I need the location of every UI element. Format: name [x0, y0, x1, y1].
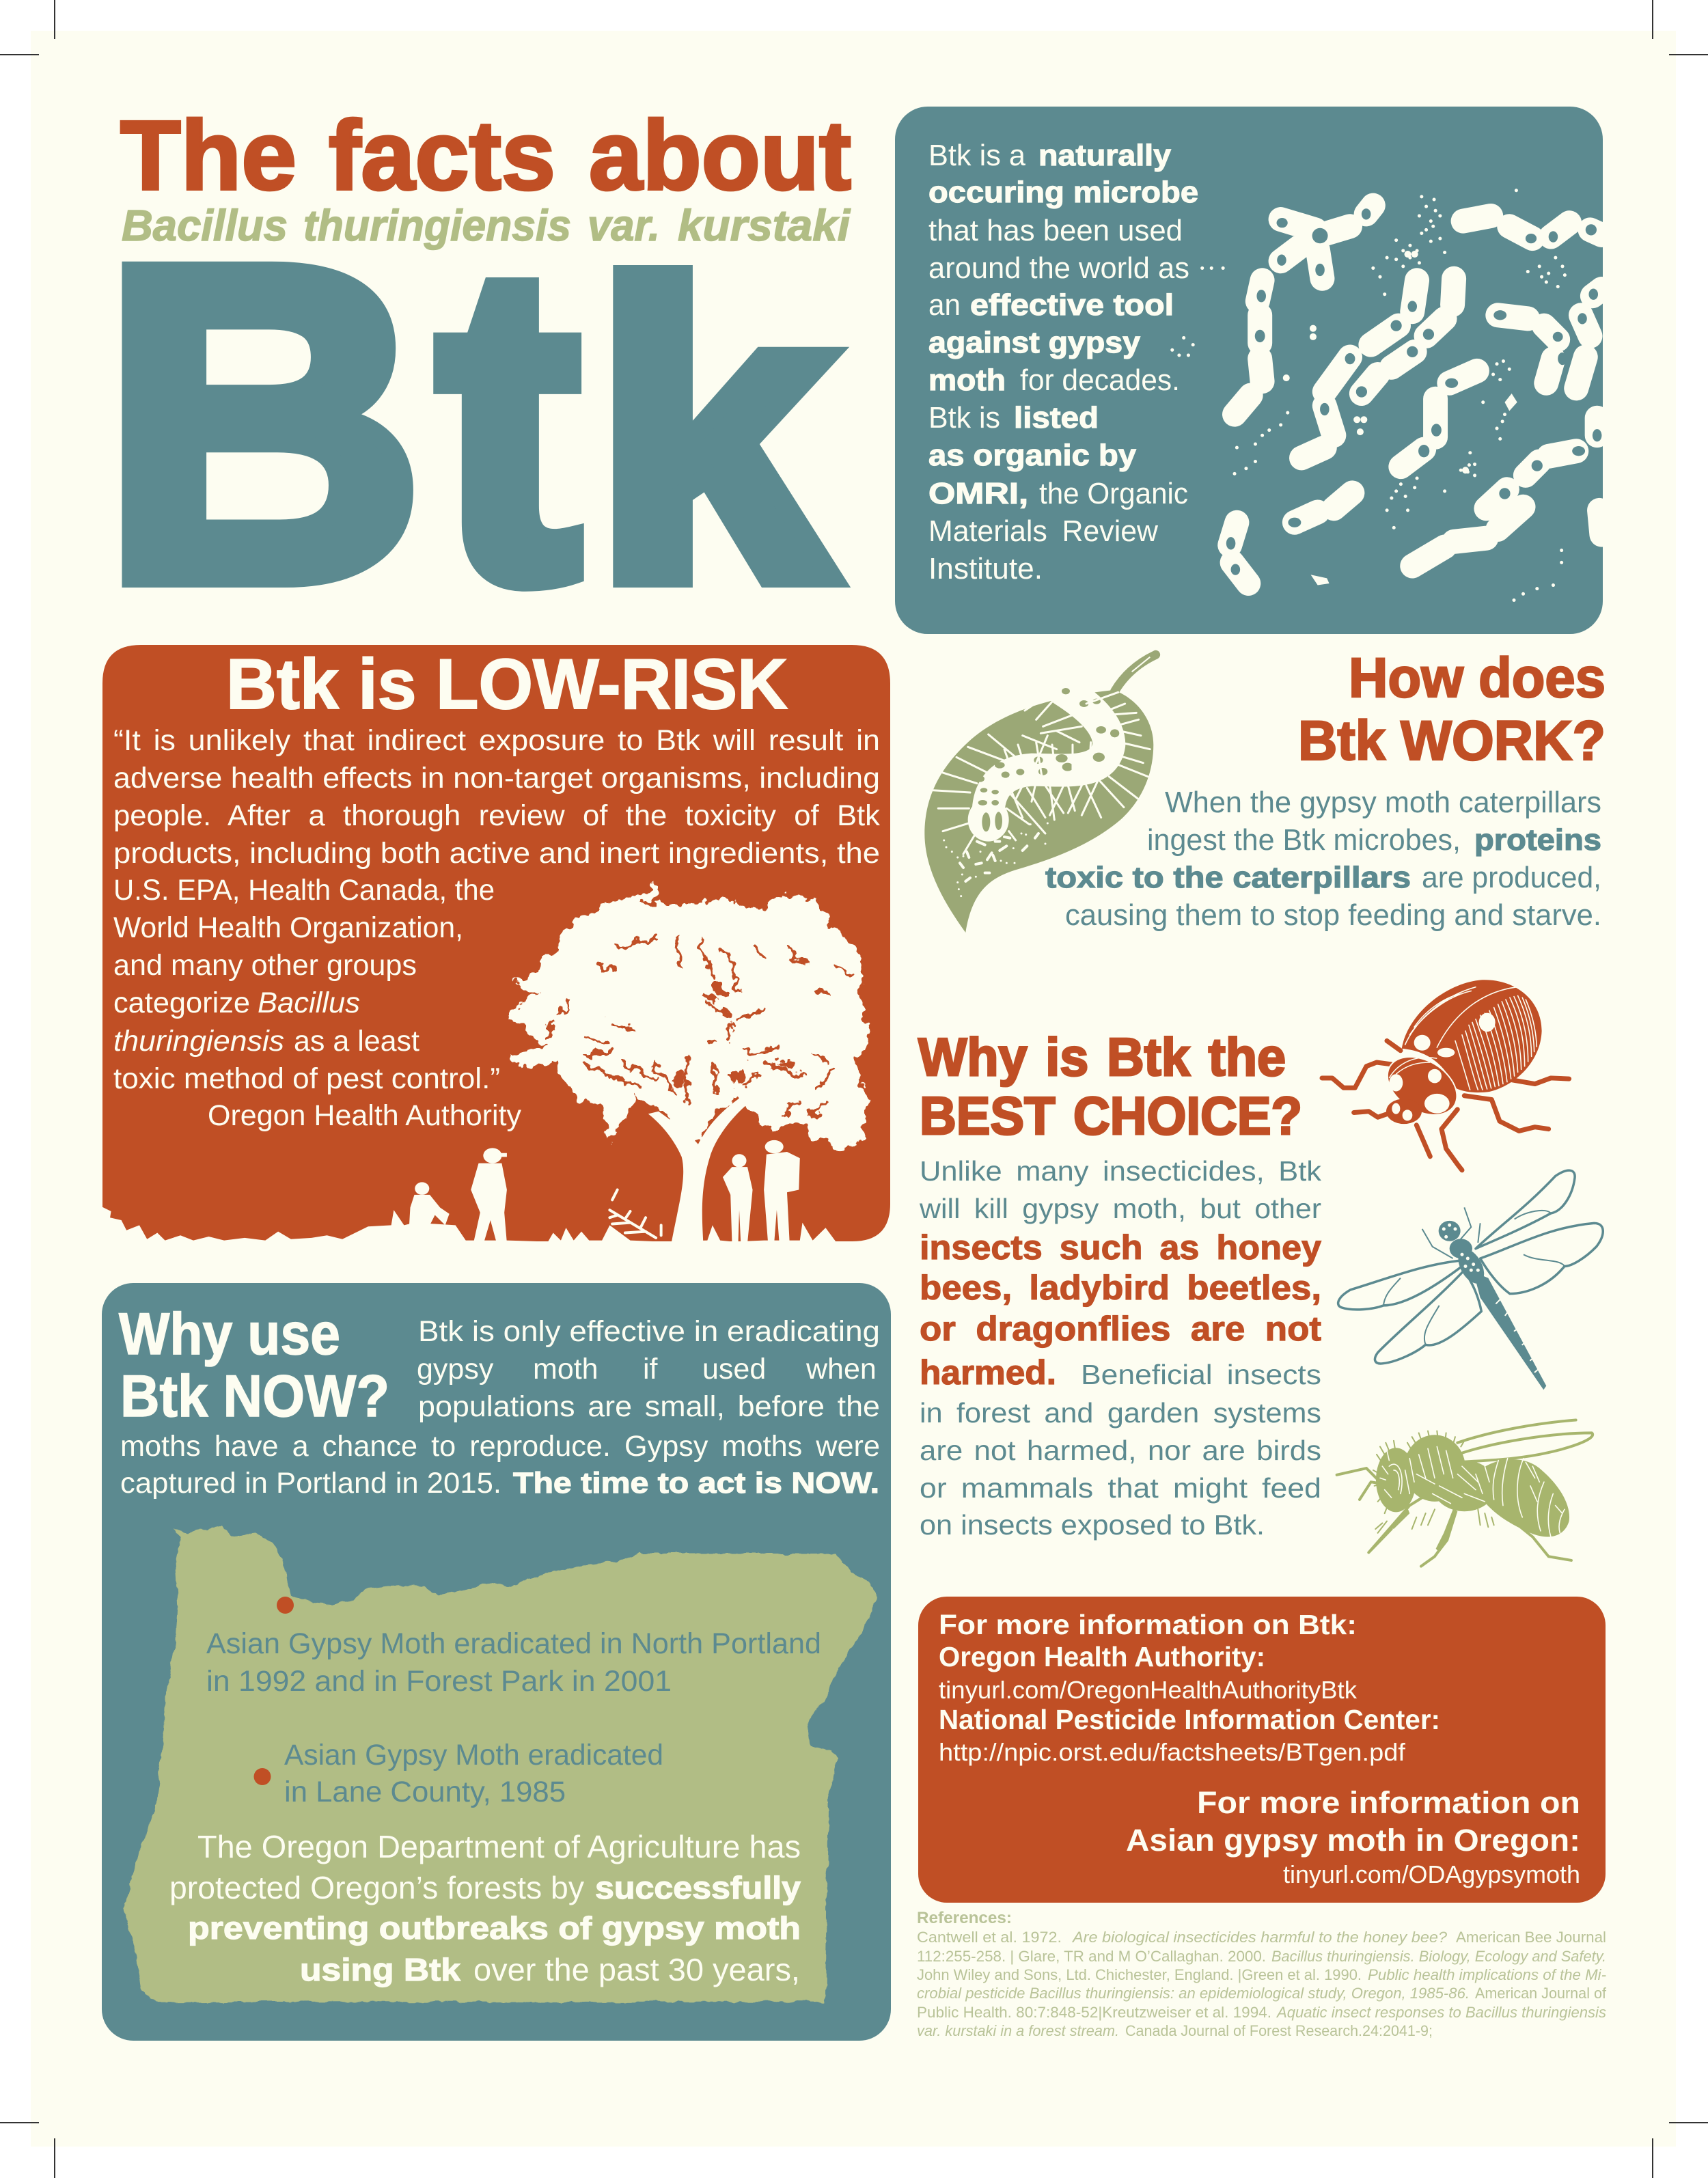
text: health quote: and many other groups — [113, 949, 417, 982]
text: Lane County: in Lane County, 1985 — [284, 1776, 566, 1808]
subtitle: species name: var. — [588, 201, 660, 250]
panel: what is Btk — [895, 107, 1603, 634]
heading: Why is Btk the BEST CHOICE: Why is Btk the — [918, 1027, 1286, 1087]
text: Btk intro: OMRI, — [928, 477, 1028, 510]
text: Btk intro: an — [928, 288, 961, 322]
text: why best choice: insects such as honey — [920, 1228, 1321, 1267]
text: Btk intro: effective tool — [970, 288, 1174, 322]
heading: Why use Btk NOW — [119, 1301, 389, 1429]
references: American Journal of — [1475, 1985, 1607, 2002]
text: links: tinyurl.com/ODAgypsymoth — [1283, 1860, 1580, 1888]
giant Btk heading: k — [594, 201, 834, 666]
text: why now: populations are small, before the — [418, 1390, 880, 1423]
text: health quote: U.S. EPA, Health Canada, the — [113, 874, 495, 907]
references: Bacillus thuringiensis. Biology, Ecology and Safety. — [1271, 1948, 1606, 1965]
text: Lane County: Asian Gypsy Moth eradicated — [284, 1739, 663, 1772]
person: hiker two — [764, 1140, 800, 1243]
subtitle: species name: thuringiensis — [303, 201, 571, 250]
text: how Btk works: proteins — [1474, 823, 1601, 857]
text: health quote: people. After a thorough review of the toxicity of Btk — [113, 799, 880, 832]
text: health quote: thuringiensis — [113, 1025, 284, 1058]
heading: Btk is LOW-RISK: Btk is LOW-RISK — [226, 645, 788, 724]
text: North Portland: Asian Gypsy Moth eradicated in North Portland — [206, 1627, 821, 1660]
heading: Why use Btk NOW: Btk NOW? — [120, 1364, 389, 1429]
text: links: For more information on — [1197, 1785, 1580, 1820]
heading: How does Btk WORK — [1298, 647, 1606, 772]
text: Oregon Department of Agriculture: using Btk — [300, 1952, 460, 1987]
illustration: tree crown — [507, 881, 872, 1147]
text: health quote: products, including both active and inert ingredients, the — [113, 837, 880, 870]
heading: Why is Btk the BEST CHOICE: BEST CHOICE? — [920, 1086, 1302, 1146]
text: why now: if — [643, 1353, 659, 1386]
illustration: dragonfly — [1338, 1170, 1603, 1390]
text: Btk intro: occuring microbe — [928, 176, 1198, 209]
illustration: trunk and people — [101, 1086, 892, 1266]
references: 112:255-258. | Glare, TR and M O’Callaghan. 2000. — [917, 1948, 1266, 1965]
text: Btk intro — [928, 139, 1198, 585]
text: why now: when — [805, 1353, 877, 1386]
text: why now: moth — [533, 1353, 598, 1386]
text: Oregon Department of Agriculture: over the past 30 years, — [473, 1952, 800, 1987]
text: Btk intro: that has been used — [928, 214, 1183, 247]
panel: more information — [918, 1597, 1606, 1903]
references: Cantwell et al. 1972. — [917, 1929, 1062, 1946]
references: John Wiley and Sons, Ltd. Chichester, England. |Green et al. 1990. — [917, 1966, 1362, 1983]
text: Oregon Department of Agriculture: preventing outbreaks of gypsy moth — [188, 1910, 801, 1946]
text: why best choice: or mammals that might feed — [920, 1472, 1321, 1504]
giant Btk heading: B — [102, 176, 423, 672]
giant Btk heading: t — [438, 176, 579, 672]
map marker: Portland — [277, 1597, 294, 1614]
text: Btk intro: the Organic — [1039, 477, 1188, 510]
heading: How does Btk WORK: Btk WORK? — [1298, 710, 1606, 772]
text: Btk intro: listed — [1014, 401, 1099, 435]
illustration: ladybird — [1322, 980, 1569, 1170]
title: The facts about: The — [120, 100, 297, 210]
text: Oregon Department of Agriculture: protected Oregon’s forests by — [169, 1870, 584, 1905]
text: why best choice: on insects exposed to Btk. — [920, 1509, 1265, 1541]
text: why now: used — [702, 1353, 766, 1386]
title: The facts about: about — [589, 100, 851, 210]
text: why best choice: Beneficial insects — [1081, 1359, 1321, 1390]
text: links: Oregon Health Authority: — [939, 1641, 1265, 1672]
text: why now: Btk is only effective in eradicating — [418, 1315, 880, 1348]
text: why best choice: harmed. — [920, 1353, 1056, 1392]
subtitle: species name: Bacillus — [122, 201, 288, 250]
map: Oregon — [124, 1526, 878, 2002]
text: Btk intro: Institute. — [928, 552, 1043, 585]
panel: Btk is LOW-RISK — [101, 645, 892, 1266]
text: why best choice: bees, ladybird beetles, — [920, 1269, 1321, 1307]
references: American Bee Journal — [1456, 1929, 1606, 1946]
text: Btk intro: against gypsy — [928, 326, 1141, 359]
title: The facts about: facts — [329, 100, 555, 210]
text: health quote: Bacillus — [258, 987, 360, 1019]
giant Btk heading — [102, 176, 834, 672]
text: Btk intro: moth — [928, 363, 1006, 397]
text: why best choice — [919, 1155, 1322, 1541]
text: Btk intro: for decades. — [1020, 363, 1180, 397]
text: why best choice: will kill gypsy moth, but other — [919, 1193, 1321, 1224]
text: how Btk works: are produced, — [1422, 861, 1601, 894]
text: why now: The time to act is NOW. — [513, 1467, 879, 1500]
text: how Btk works: causing them to stop feeding and starve. — [1065, 898, 1601, 932]
text: Btk intro: Btk is a — [928, 139, 1026, 172]
map marker: Lane County — [254, 1768, 271, 1785]
text: health quote: categorize — [113, 987, 250, 1019]
text: links: tinyurl.com/OregonHealthAuthorityBtk — [939, 1676, 1358, 1704]
heading: How does Btk WORK: How does — [1349, 647, 1606, 709]
tree trunk — [648, 1086, 767, 1243]
subtitle: species name — [122, 201, 851, 250]
text: North Portland: in 1992 and in Forest Park in 2001 — [206, 1665, 672, 1698]
person: seated — [409, 1182, 450, 1225]
text: why now — [120, 1315, 880, 1500]
text: health quote: Oregon Health Authority — [208, 1099, 521, 1132]
references: Public health implications of the Mi- — [1368, 1966, 1606, 1983]
references: References: — [917, 1909, 1012, 1927]
text: health quote: as a least — [294, 1025, 419, 1058]
ground silhouette — [101, 1207, 892, 1266]
text: how Btk works: When the gypsy moth caterpillars — [1165, 786, 1601, 819]
text: Oregon Department of Agriculture: successfully — [595, 1870, 801, 1905]
text: health quote: World Health Organization, — [113, 911, 463, 944]
references: Are biological insecticides harmful to the honey bee? — [1071, 1929, 1448, 1946]
text: why best choice: are not harmed, nor are birds — [920, 1435, 1321, 1466]
text: Lane County — [284, 1739, 663, 1808]
references: Public Health. 80:7:848-52|Kreutzweiser et al. 1994. — [917, 2004, 1271, 2021]
text: Oregon Department of Agriculture: The Oregon Department of Agriculture has — [197, 1829, 801, 1864]
text: health quote: toxic method of pest control.” — [113, 1062, 500, 1095]
text: links: National Pesticide Information Center: — [939, 1704, 1440, 1735]
references: var. kurstaki in a forest stream. — [917, 2022, 1119, 2039]
references — [917, 1909, 1607, 2039]
text: why best choice: in forest and garden systems — [920, 1397, 1321, 1429]
text: Btk intro: as organic by — [928, 439, 1137, 472]
text: links: For more information on Btk: — [939, 1609, 1357, 1640]
text: health quote: “It is unlikely that indirect exposure to Btk will result in — [113, 724, 880, 757]
heading: Why use Btk NOW: Why use — [119, 1301, 340, 1367]
text: health quote — [113, 724, 880, 1132]
text: why best choice: Unlike many insecticides, Btk — [920, 1155, 1322, 1187]
text: why now: moths have a chance to reproduce. Gypsy moths were — [120, 1430, 880, 1463]
text: health quote: adverse health effects in non-target organisms, including — [113, 762, 880, 795]
subtitle: species name: kurstaki — [678, 201, 851, 250]
text: why now: gypsy — [417, 1353, 494, 1386]
references: Aquatic insect responses to Bacillus thuringiensis — [1276, 2004, 1606, 2021]
text: links — [939, 1609, 1580, 1888]
title: The facts about — [120, 100, 851, 210]
text: North Portland — [206, 1627, 821, 1698]
text: why best choice: or dragonflies are not — [920, 1310, 1321, 1348]
text: Btk intro: Materials Review — [928, 514, 1158, 548]
fern — [609, 1190, 661, 1238]
references: Canada Journal of Forest Research.24:2041-9; — [1125, 2022, 1433, 2039]
person: standing walker — [471, 1148, 507, 1243]
text: how Btk works: ingest the Btk microbes, — [1147, 823, 1461, 857]
illustration: bacteria — [1172, 191, 1601, 600]
text: how Btk works — [1045, 786, 1601, 932]
text: Btk intro: Btk is — [928, 401, 1000, 435]
text: Oregon Department of Agriculture — [169, 1829, 801, 1987]
text: links: http://npic.orst.edu/factsheets/BTgen.pdf — [939, 1738, 1406, 1766]
text: links: Asian gypsy moth in Oregon: — [1126, 1823, 1580, 1858]
text: Btk intro: naturally — [1038, 139, 1172, 172]
text: Btk intro: around the world as — [928, 251, 1189, 285]
heading: Why is Btk the BEST CHOICE — [918, 1027, 1302, 1146]
illustration: leaf with caterpillar — [924, 654, 1156, 933]
text: why now: captured in Portland in 2015. — [120, 1467, 501, 1500]
person: hiker one — [723, 1154, 753, 1243]
references: crobial pesticide Bacillus thuringiensis: an epidemiological study, Oregon, 1985-86. — [917, 1985, 1470, 2002]
panel: Why use Btk NOW — [102, 1283, 891, 2041]
text: how Btk works: toxic to the caterpillars — [1045, 861, 1411, 894]
illustration: honey bee — [1337, 1420, 1593, 1567]
